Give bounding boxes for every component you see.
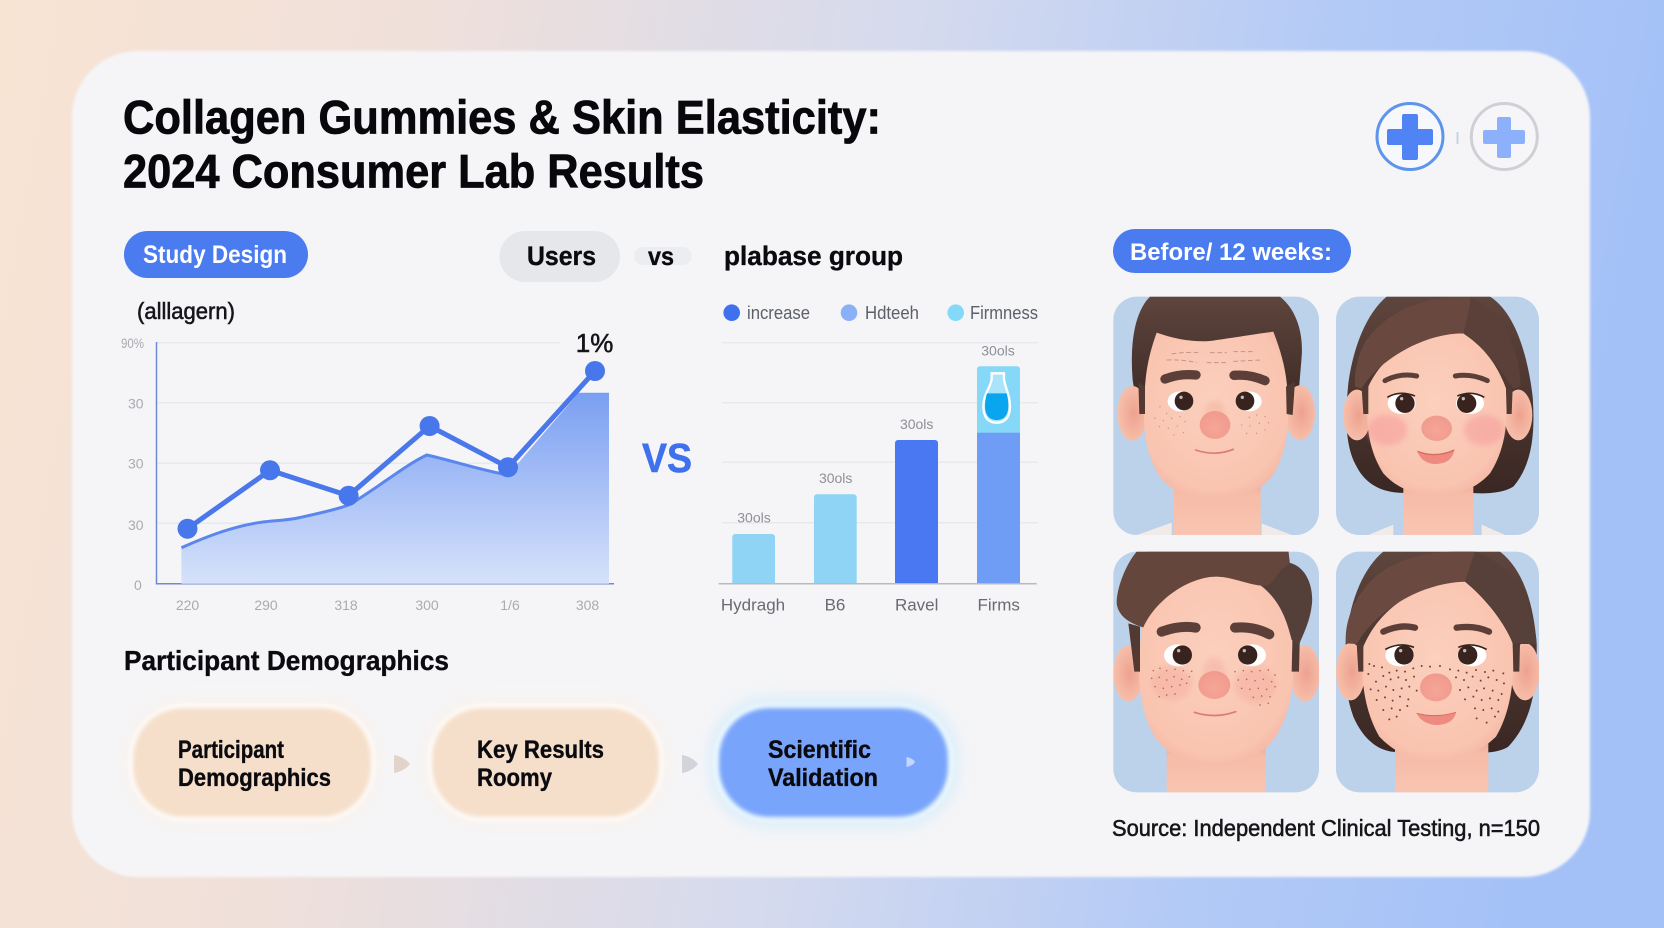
bar value labels: 30ols <box>981 342 1015 358</box>
title <box>123 92 881 198</box>
area series top line <box>181 455 508 548</box>
bar category labels: Ravel <box>895 596 938 614</box>
bar category labels <box>721 596 1020 614</box>
title: 2024 Consumer Lab Results <box>123 146 704 198</box>
heading: participant demographics: Participant Demographics <box>124 645 449 676</box>
y axis labels: 30 <box>128 456 144 472</box>
y axis labels: 90% <box>121 335 144 351</box>
icon: water bottle <box>983 373 1010 423</box>
step: scientific validation <box>710 698 957 826</box>
bar chart: skin metrics <box>719 303 1038 614</box>
step: key results: Key Results <box>477 736 604 764</box>
pill: study design <box>124 231 308 278</box>
x axis labels: 308 <box>576 597 599 613</box>
legend: Firmness <box>970 303 1038 323</box>
pill: before / 12 weeks <box>1113 229 1351 273</box>
x axis labels: 220 <box>176 597 199 613</box>
legend <box>723 303 1038 323</box>
portrait: woman before <box>1336 297 1539 536</box>
legend: Hdteeh <box>865 303 919 323</box>
bar category labels: Firms <box>977 596 1020 614</box>
bar category labels: B6 <box>825 596 845 614</box>
source note: Source: Independent Clinical Testing, n=150 <box>1112 815 1540 841</box>
vs label: VS <box>642 435 692 481</box>
arrow <box>682 755 698 773</box>
x axis labels: 290 <box>254 597 278 613</box>
line chart: collagen <box>121 298 614 613</box>
comparison header: users vs placebo group: plabase group <box>724 241 903 271</box>
pill: before / 12 weeks: Before/ 12 weeks: <box>1130 239 1332 266</box>
icons: medical plus badges <box>1377 104 1537 170</box>
arrow <box>394 755 410 773</box>
y axis labels: 0 <box>134 577 142 593</box>
step: participant demographics <box>125 700 379 825</box>
step: participant demographics: Participant <box>178 736 285 764</box>
step: scientific validation: Validation <box>768 764 878 792</box>
bar value labels <box>737 342 1015 526</box>
bars <box>732 366 1020 584</box>
comparison header: users vs placebo group: Users <box>527 241 596 271</box>
y axis labels: 30 <box>128 396 144 412</box>
bar value labels: 30ols <box>737 510 771 526</box>
title: Collagen Gummies & Skin Elasticity: <box>123 92 881 144</box>
peak value: 1% <box>576 328 613 358</box>
bar value labels: 30ols <box>819 470 852 486</box>
portrait: woman after <box>1336 551 1540 793</box>
pill: study design: Study Design <box>143 241 287 269</box>
flow: three process pills <box>125 698 957 826</box>
chart heading: (alllagern) <box>137 298 235 324</box>
comparison header: users vs placebo group <box>500 231 903 282</box>
legend: increase <box>747 303 810 323</box>
portrait: man after <box>1113 550 1320 793</box>
step: participant demographics: Demographics <box>178 764 331 792</box>
step: key results: Roomy <box>477 764 552 792</box>
portrait: man before <box>1113 297 1319 536</box>
x axis labels: 300 <box>415 597 439 613</box>
grid lines <box>722 343 1038 523</box>
y axis labels <box>121 335 144 593</box>
x axis labels: 1/6 <box>500 597 520 613</box>
bar value labels: 30ols <box>900 416 933 432</box>
comparison header: users vs placebo group: vs <box>648 241 674 271</box>
step: scientific validation: Scientific <box>768 736 871 764</box>
line series with points <box>178 361 605 539</box>
y axis labels: 30 <box>128 517 144 533</box>
step: key results <box>424 700 667 825</box>
baseline <box>719 583 1037 585</box>
bar category labels: Hydragh <box>721 596 785 614</box>
grid lines and axes <box>156 342 614 584</box>
x axis labels <box>176 597 599 613</box>
area series <box>181 393 609 584</box>
x axis labels: 318 <box>334 597 358 613</box>
portraits group <box>1113 297 1540 793</box>
